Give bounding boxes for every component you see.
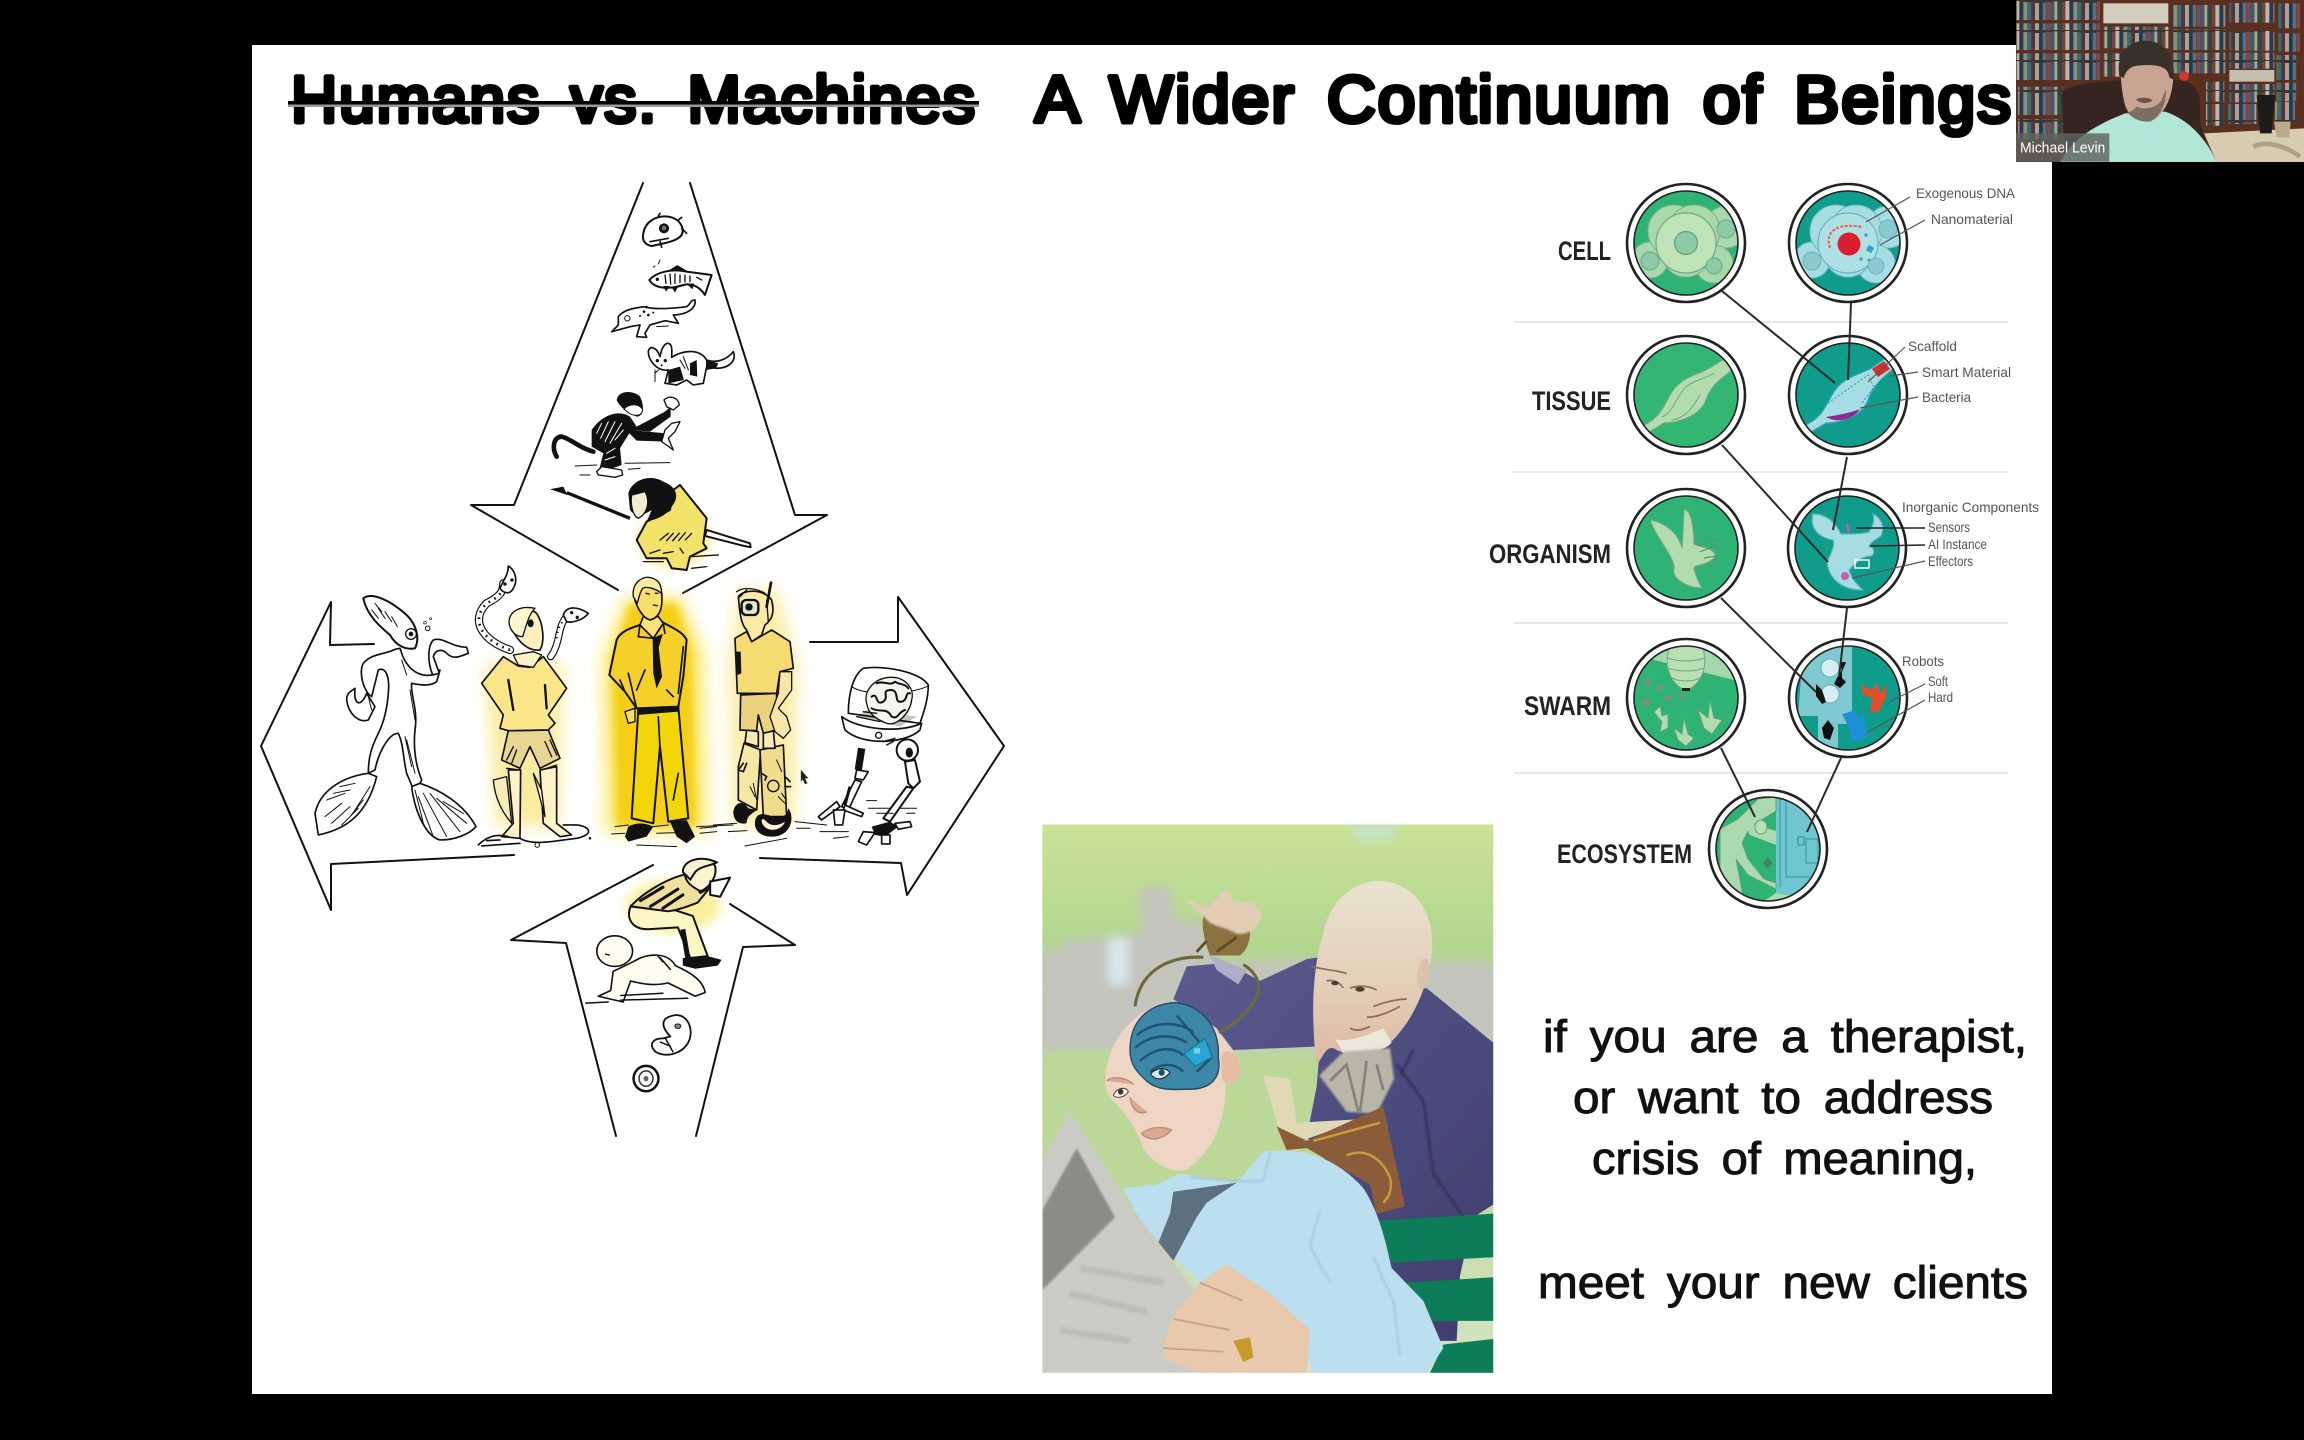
annotations: engineered cell xyxy=(1866,185,2016,245)
webcam: speaker xyxy=(2060,41,2217,162)
annotations: engineered swarm: Robots xyxy=(1902,653,1944,669)
annotations: engineered swarm: Hard xyxy=(1928,689,1953,705)
text block: message to therapists: meet your new clients xyxy=(1538,1257,2028,1308)
annotations: engineered organism xyxy=(1852,499,2039,578)
icon: fertilised egg xyxy=(634,1066,658,1091)
icon: aquatic chimera xyxy=(315,596,476,840)
label: TISSUE: TISSUE xyxy=(1532,386,1611,416)
circle: ecosystem xyxy=(1708,789,1828,911)
label: ORGANISM: ORGANISM xyxy=(1489,539,1611,569)
webcam: name tag xyxy=(2016,133,2109,162)
illustration: cyborg man's shirt and tie xyxy=(1123,1151,1443,1373)
annotations: engineered organism: Effectors xyxy=(1928,553,1973,569)
illustration: book xyxy=(1263,1075,1405,1214)
annotations: engineered organism: AI Instance xyxy=(1928,536,1987,552)
icon: brain in a jar on robotic legs xyxy=(818,667,928,845)
label: SWARM: SWARM xyxy=(1524,691,1611,721)
arrow: to the left, chimeras xyxy=(261,602,514,910)
annotations: engineered tissue: Scaffold xyxy=(1908,338,1957,354)
annotations: engineered tissue: Bacteria xyxy=(1922,389,1971,405)
label: ECOSYSTEM: ECOSYSTEM xyxy=(1557,839,1692,869)
icon: crouching boy with phone xyxy=(626,859,730,969)
circle: engineered organism xyxy=(1787,488,1907,608)
arrow: to the right, machines xyxy=(760,597,1004,895)
title: replacement phrase: A Wider Continuum of Beings xyxy=(1035,62,2013,136)
icon: fish xyxy=(649,260,712,295)
icon: monkey xyxy=(554,392,680,477)
connector lines between levels xyxy=(1721,291,1851,832)
illustration: cyborg man's head xyxy=(1105,1003,1240,1171)
annotations: engineered swarm: Soft xyxy=(1928,673,1948,689)
diagram: hybrid scale panel xyxy=(1489,183,2039,911)
circle: natural organism xyxy=(1626,488,1746,608)
text block: message to therapists: or want to address xyxy=(1573,1072,1993,1123)
circle: natural swarm xyxy=(1626,638,1746,758)
annotations: engineered cell: Nanomaterial xyxy=(1931,211,2013,227)
circle: engineered swarm xyxy=(1788,638,1908,758)
circle: engineered tissue xyxy=(1788,335,1908,455)
text block: message to therapists: if you are a therapist, xyxy=(1543,1011,2027,1062)
illustration: old man adjusting cyborg man's brain on a park bench xyxy=(1042,825,1493,1373)
icon: small mammal xyxy=(648,343,734,385)
circle: engineered cell xyxy=(1788,183,1909,303)
webcam background: bookshelves xyxy=(2016,0,2304,162)
illustration background: park xyxy=(1042,825,1493,1373)
annotations: engineered tissue: Smart Material xyxy=(1922,364,2011,380)
illustration: hand with ring xyxy=(1163,1264,1310,1373)
text block: message to therapists: crisis of meaning, xyxy=(1592,1133,1977,1184)
level dividers xyxy=(1513,322,2008,773)
label: CELL: CELL xyxy=(1558,236,1611,266)
illustration: newspaper xyxy=(1042,1112,1203,1373)
webcam: name tag: Michael Levin xyxy=(2020,141,2105,157)
annotations: engineered tissue xyxy=(1860,338,2011,408)
icon: cursor xyxy=(801,770,808,784)
annotations: engineered swarm xyxy=(1868,653,1953,732)
text block: message to therapists xyxy=(1538,1011,2028,1308)
title: struck-through phrase: Humans vs. Machines xyxy=(291,62,977,136)
icon: human with robotic legs xyxy=(700,583,827,846)
diagram: continuum of beings arrows and figures xyxy=(261,183,1004,1136)
webcam: chair xyxy=(2062,80,2213,162)
icon: caveman with spear xyxy=(550,478,751,570)
annotations: engineered cell: Exogenous DNA xyxy=(1916,185,2016,201)
title xyxy=(288,62,2013,136)
icon: crawling baby xyxy=(586,936,705,1003)
icon: salamander xyxy=(612,300,695,337)
arrow: from development (bottom) xyxy=(511,865,795,1136)
circle: natural cell xyxy=(1626,183,1747,303)
icon: baseline human in shirt and tie xyxy=(602,577,733,847)
icon: human with snakes xyxy=(478,566,591,847)
illustration: old man xyxy=(1173,881,1493,1341)
circle: natural tissue xyxy=(1626,335,1746,455)
annotations: engineered organism: Sensors xyxy=(1928,519,1970,535)
icon: embryo xyxy=(652,1015,691,1055)
annotations: engineered organism: Inorganic Components xyxy=(1902,499,2039,515)
arrow: from evolution (top) xyxy=(471,183,827,593)
figures: left to right in the horizontal row xyxy=(315,566,733,847)
figures: evolutionary ancestors xyxy=(550,213,751,570)
illustration: hand and wire probe xyxy=(1135,888,1262,1039)
icon: single cell xyxy=(643,213,687,247)
webcam: speaker video thumbnail xyxy=(2016,0,2304,162)
figures: developmental stages xyxy=(586,859,730,1091)
illustration: bench xyxy=(1377,1214,1493,1373)
slide background xyxy=(252,45,2052,1394)
